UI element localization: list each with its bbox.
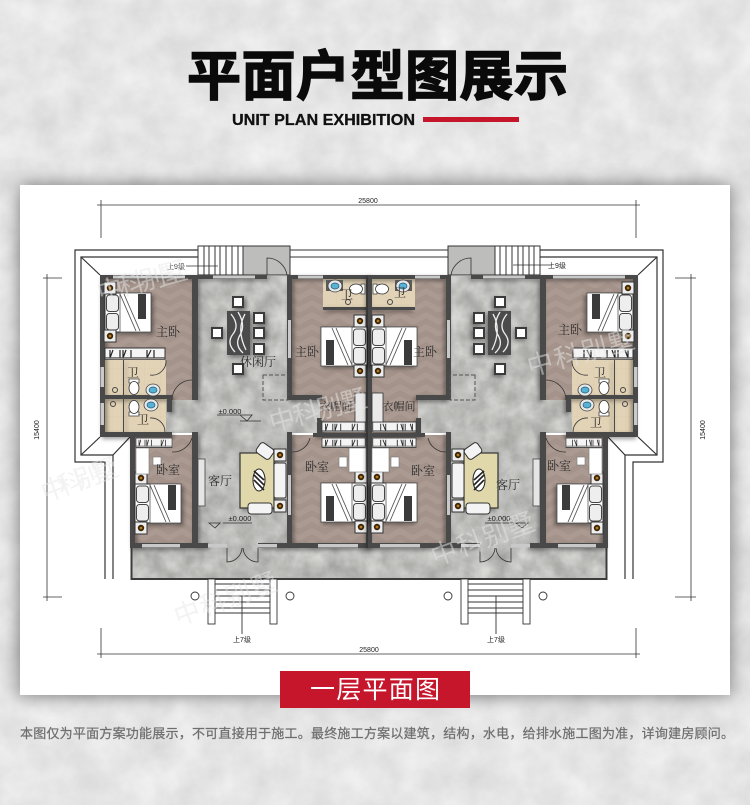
doors [150,258,310,562]
room labels: 卫 [394,286,406,300]
nightstands [104,282,367,534]
room labels: 主卧 [295,344,320,359]
elevation marks: ±0.000 [219,407,241,416]
windows [100,276,358,548]
right unit floor plan (mirror of left) [368,246,663,579]
white cabinets and stools [136,448,366,474]
wardrobes [105,348,366,447]
hall marble floor [166,276,320,546]
dining set [211,296,265,375]
room labels: 主卧 [558,322,583,337]
room labels: 卫 [594,366,606,380]
room labels: 卫 [127,366,139,380]
watermarks: 中科别墅 [37,452,122,508]
roof outline [75,250,198,579]
porch slab [132,546,606,579]
room labels [127,286,606,492]
living room set [198,441,286,514]
elevation marks [209,407,528,528]
room labels: 卧室 [411,463,435,478]
red accent bar [423,117,519,122]
room labels: 衣帽间 [320,399,352,413]
stair labels: 上9级 [548,261,566,270]
dimension labels: 15400 [700,420,707,440]
room labels: 客厅 [496,477,520,492]
porch outline [132,546,606,579]
bath fixtures [110,280,365,416]
stair labels [167,261,566,644]
watermarks: 中科别墅 [524,324,638,382]
rear stair and landing [198,246,369,275]
elevation marks: ±0.000 [488,514,510,523]
subtitle: UNIT PLAN EXHIBITION: UNIT PLAN EXHIBITION [232,112,415,129]
dimension lines [43,200,696,658]
dimension labels: 25800 [358,198,378,205]
watermarks: 中科别墅 [266,383,370,438]
dimension labels: 15400 [34,420,41,440]
watermarks: 中科别墅 [170,567,282,632]
stair labels: 上7级 [233,635,251,644]
dashed stair void [263,375,288,400]
room labels: 客厅 [208,473,232,488]
white plan panel [20,185,730,695]
watermarks: 中科别墅 [427,507,539,572]
room labels: 卧室 [547,458,571,473]
room labels: 卧室 [156,462,180,477]
watermarks: 中科别墅 [94,255,190,308]
title: 平面户型图展示 [187,47,568,107]
room labels: 卧室 [305,459,329,474]
room floors [103,278,367,545]
dimension labels [34,198,707,654]
floor name badge: 一层平面图 [310,676,440,704]
room labels: 卫 [590,416,602,430]
floor name badge [280,671,470,708]
elevation marks: ±0.000 [229,514,251,523]
room labels: 主卧 [156,324,181,339]
watermarks [37,255,638,632]
front steps right [444,579,547,634]
room labels: 休闲厅 [240,354,276,369]
dimension labels: 25800 [359,647,379,654]
left unit floor plan [75,246,370,579]
room labels: 衣帽间 [382,399,416,413]
room labels: 卫 [137,413,149,427]
room labels: 卫 [341,288,353,302]
walls [100,275,370,548]
front steps left [191,579,294,634]
beds [105,293,367,523]
disclaimer text: 本图仅为平面方案功能展示，不可直接用于施工。最终施工方案以建筑，结构，水电，给排水施工图为准，详询建房顾问。 [20,726,734,741]
stair labels: 上7级 [487,635,505,644]
stair labels: 上9级 [167,262,185,271]
room labels: 主卧 [413,344,438,359]
